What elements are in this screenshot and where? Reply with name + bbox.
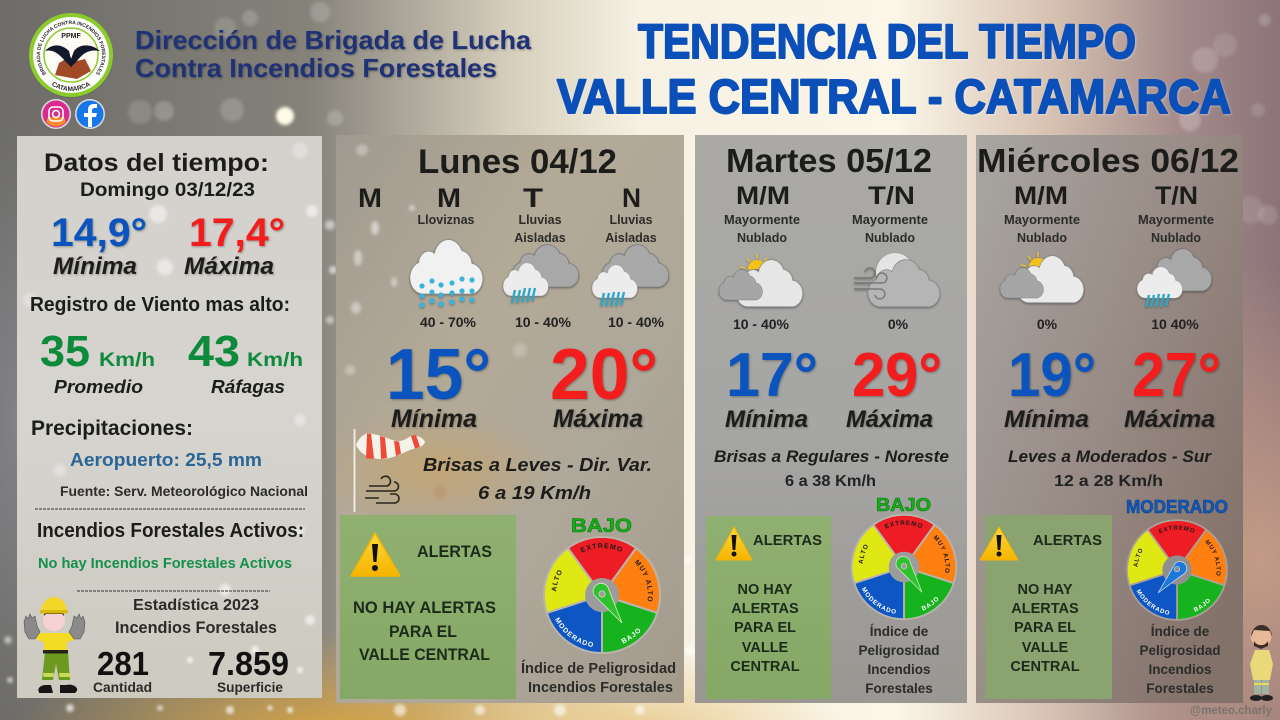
alert message: ALERTAS (731, 601, 799, 617)
organization logo: CATAMARCA (52, 82, 90, 91)
icon: wind (365, 476, 399, 503)
gauge caption: Incendios (1148, 662, 1212, 677)
organization name (135, 25, 532, 83)
risk label: BAJO (876, 495, 931, 515)
forecast: mañana: M (437, 183, 461, 213)
forecast: tarde/noche (1137, 182, 1214, 332)
organization logo (29, 13, 113, 98)
alert message: VALLE CENTRAL (359, 645, 490, 664)
fire danger gauge: EXTREMO (884, 520, 922, 529)
forecast: mañana/mediodía (719, 182, 803, 332)
alert message: ALERTAS (1011, 601, 1079, 617)
icon: facebook (75, 99, 105, 129)
forecast: tarde: Lluvias (518, 213, 562, 227)
icon: warning triangle (716, 527, 752, 560)
panel: lunes 04/12 (336, 135, 684, 703)
wind gusts: Km/h (247, 350, 303, 371)
minimum temperature: 14,9° (51, 211, 147, 255)
statistics heading: Incendios Forestales (115, 618, 277, 637)
forecast: tarde/noche: T/N (1155, 182, 1198, 210)
day heading: Miércoles 06/12 (977, 142, 1239, 179)
maximum temperature: Máxima (846, 406, 933, 433)
icon: isolated rain cloud (503, 245, 579, 303)
statistic: superficie: Superficie (217, 679, 283, 695)
risk label: BAJO (571, 516, 632, 537)
alert message: NO HAY (1017, 582, 1073, 598)
wind average: Km/h (99, 350, 155, 371)
panel: martes 05/12 (695, 135, 967, 703)
alert message: CENTRAL (1010, 659, 1080, 675)
maximum temperature: Máxima (184, 253, 274, 280)
panel: miércoles 06/12 (976, 135, 1243, 703)
statistic: cantidad: 281 (97, 645, 149, 682)
icon: drizzle cloud (410, 240, 483, 308)
forecast: tarde/noche: T/N (868, 182, 915, 210)
gauge caption: Peligrosidad (858, 643, 940, 658)
forecast: mañana/mediodía: M/M (736, 182, 790, 210)
wind forecast (423, 455, 652, 503)
forecast: mañana/mediodía: Mayormente (1004, 213, 1080, 227)
wind forecast: 6 a 19 Km/h (478, 483, 591, 503)
title: TENDENCIA DEL TIEMPO (638, 16, 1136, 69)
minimum temperature (1004, 341, 1096, 433)
minimum temperature: 17° (726, 341, 818, 410)
organization logo: BRIGADA DE LUCHA CONTRA INCENDIOS FORESTALES (36, 20, 106, 76)
fire danger gauge: ALTO (1134, 548, 1142, 568)
forecast: noche (592, 183, 669, 330)
wind average (40, 327, 155, 397)
icon: instagram (41, 99, 71, 129)
fire danger gauge (850, 514, 958, 620)
organization name: Dirección de Brigada de Lucha (135, 25, 532, 55)
alert box: ALERTAS (417, 542, 492, 561)
forecast: mañana: 40 - 70% (420, 314, 477, 330)
fire danger gauge: EXTREMO (1158, 526, 1194, 534)
source: Fuente: Serv. Meteorológico Nacional (60, 484, 308, 499)
alert box (980, 515, 1112, 699)
wind gusts (188, 327, 303, 397)
forecast: noche: 10 - 40% (608, 314, 665, 330)
maximum temperature (846, 341, 942, 433)
active fires status: No hay Incendios Forestales Activos (38, 555, 292, 572)
minimum temperature: Mínima (725, 406, 808, 433)
fire danger gauge: ALTO (552, 570, 562, 592)
forecast: tarde: T (523, 183, 544, 213)
forecast: tarde/noche: Nublado (865, 231, 915, 245)
icon: sun behind cloud (1000, 252, 1084, 303)
heading: datos del tiempo: Datos del tiempo: (44, 149, 269, 177)
forecast: tarde/noche: 10 40% (1151, 316, 1199, 332)
forecast: mañana/mediodía: 10 - 40% (733, 316, 790, 332)
maximum temperature: 17,4° (189, 211, 285, 255)
panel droplets (23, 142, 318, 673)
alert message (730, 582, 800, 675)
fire danger gauge: BAJO (1194, 598, 1210, 612)
forecast: mañana/mediodía: 0% (1037, 316, 1058, 332)
alert message: VALLE (742, 640, 789, 656)
icon: warning triangle (351, 533, 400, 576)
panel droplets (345, 144, 527, 499)
fire danger gauge (543, 536, 661, 654)
gauge caption: Índice de Peligrosidad (521, 660, 676, 677)
minimum temperature: Mínima (391, 405, 477, 433)
fire danger gauge: MUY ALTO (634, 560, 653, 602)
organization name: Contra Incendios Forestales (135, 53, 497, 83)
day heading: Martes 05/12 (726, 142, 932, 179)
gauge caption: Incendios Forestales (528, 680, 673, 696)
alert box: ALERTAS (1033, 532, 1102, 549)
wind average: 35 (40, 327, 90, 376)
credit: @meteo.charly (1190, 705, 1273, 717)
icon: moon, cloud and wind (854, 253, 940, 307)
alert message: VALLE (1022, 640, 1069, 656)
statistic: cantidad: Cantidad (93, 679, 152, 695)
forecast: mañana/mediodía: M/M (1014, 182, 1068, 210)
forecast: tarde/noche: Mayormente (1138, 213, 1214, 227)
gauge caption: Incendios (867, 662, 931, 677)
wind forecast: 12 a 28 Km/h (1054, 473, 1163, 490)
forecast: tarde/noche: 0% (888, 316, 909, 332)
alert box (340, 515, 516, 699)
wind gusts: 43 (188, 327, 240, 376)
alert message: PARA EL (1014, 620, 1076, 636)
organization logo: PPMF (61, 33, 81, 40)
alert message: NO HAY (737, 582, 793, 598)
forecast: mañana: Lloviznas (418, 213, 475, 227)
forecast: mañana/mediodía: Nublado (1017, 231, 1067, 245)
forecast: tarde (503, 183, 579, 330)
statistic: cantidad (93, 645, 152, 695)
maximum temperature: 20° (550, 335, 658, 415)
maximum temperature: 29° (852, 341, 942, 410)
fire danger gauge: MUY ALTO (934, 535, 950, 573)
icon: meteorologist character (1250, 625, 1273, 701)
forecast: mañana (410, 183, 483, 330)
wind gusts: Ráfagas (211, 377, 285, 397)
minimum temperature: 19° (1008, 341, 1096, 410)
date: Domingo 03/12/23 (80, 180, 255, 201)
wind forecast: Brisas a Regulares - Noreste (714, 447, 949, 466)
forecast: noche: Lluvias (609, 213, 653, 227)
risk label: MODERADO (1126, 497, 1228, 517)
forecast: tarde/noche: Nublado (1151, 231, 1201, 245)
fire danger gauge: BAJO (921, 597, 938, 611)
icon: isolated rain cloud (1137, 249, 1212, 307)
alert message: CENTRAL (730, 659, 800, 675)
icon: firefighter character (24, 597, 85, 693)
forecast: noche: Aisladas (605, 231, 657, 245)
minimum temperature: Mínima (1004, 406, 1089, 433)
forecast: mañana/mediodía: Nublado (737, 231, 787, 245)
alert box (706, 516, 831, 699)
forecast: tarde/noche (852, 182, 940, 332)
forecast: tarde: Aisladas (514, 231, 566, 245)
gauge caption: Forestales (1146, 681, 1214, 696)
alert message (1010, 582, 1080, 675)
fire danger gauge: MUY ALTO (1205, 540, 1221, 576)
forecast: noche: N (622, 183, 641, 213)
icon: isolated rain cloud (592, 245, 669, 306)
maximum temperature (1124, 341, 1221, 433)
wind forecast: Leves a Moderados - Sur (1008, 447, 1212, 466)
minimum temperature: 15° (386, 335, 491, 415)
maximum temperature (184, 211, 285, 280)
icon: windsock (354, 429, 425, 512)
icon: sun behind cloud (719, 254, 803, 307)
alert message: PARA EL (389, 622, 457, 641)
panel: datos del tiempo (17, 136, 322, 698)
gauge caption: Forestales (865, 681, 933, 696)
maximum temperature: 27° (1132, 341, 1221, 410)
fire danger gauge: MODERADO (862, 586, 896, 614)
alert box: ALERTAS (753, 532, 822, 549)
heading: precipitaciones: Precipitaciones: (31, 417, 193, 440)
madrugada label: M (358, 183, 382, 213)
icon: warning triangle (980, 527, 1018, 560)
minimum temperature: Mínima (53, 253, 137, 280)
wind forecast: 6 a 38 Km/h (785, 473, 876, 490)
forecast: tarde/noche: Mayormente (852, 213, 928, 227)
title (557, 16, 1231, 124)
heading: viento: Registro de Viento mas alto: (30, 294, 290, 316)
day heading: Lunes 04/12 (418, 143, 617, 181)
forecast: tarde: 10 - 40% (515, 314, 572, 330)
minimum temperature (51, 211, 147, 280)
heading: incendios activos: Incendios Forestales Activos: (37, 520, 304, 542)
wind forecast (714, 447, 949, 490)
maximum temperature: Máxima (1124, 406, 1215, 433)
maximum temperature: Máxima (553, 405, 643, 433)
alert message: NO HAY ALERTAS (353, 598, 496, 617)
fire danger gauge: EXTREMO (580, 543, 622, 552)
gauge caption (521, 660, 676, 696)
gauge caption (1139, 624, 1221, 696)
fire danger gauge: BAJO (621, 628, 640, 644)
forecast: mañana/mediodía (1000, 182, 1084, 332)
title: VALLE CENTRAL - CATAMARCA (557, 71, 1231, 124)
fire danger gauge: MODERADO (555, 617, 593, 647)
gauge caption: Índice de (1151, 624, 1210, 639)
forecast: mañana/mediodía: Mayormente (724, 213, 800, 227)
gauge caption: Índice de (870, 624, 929, 639)
alert message: PARA EL (734, 620, 796, 636)
fire danger gauge: MODERADO (1136, 589, 1170, 614)
fire danger gauge: ALTO (858, 544, 868, 564)
wind average: Promedio (54, 377, 143, 397)
statistic: superficie: 7.859 (208, 645, 289, 682)
precipitation value: Aeropuerto: 25,5 mm (70, 450, 262, 470)
statistics heading (115, 597, 277, 637)
alert message (353, 598, 496, 664)
wind forecast: Brisas a Leves - Dir. Var. (423, 455, 652, 475)
gauge caption (858, 624, 940, 696)
statistics heading: Estadística 2023 (133, 597, 259, 614)
fire danger gauge (1126, 519, 1228, 621)
gauge caption: Peligrosidad (1139, 643, 1221, 658)
wind forecast (1008, 447, 1212, 490)
